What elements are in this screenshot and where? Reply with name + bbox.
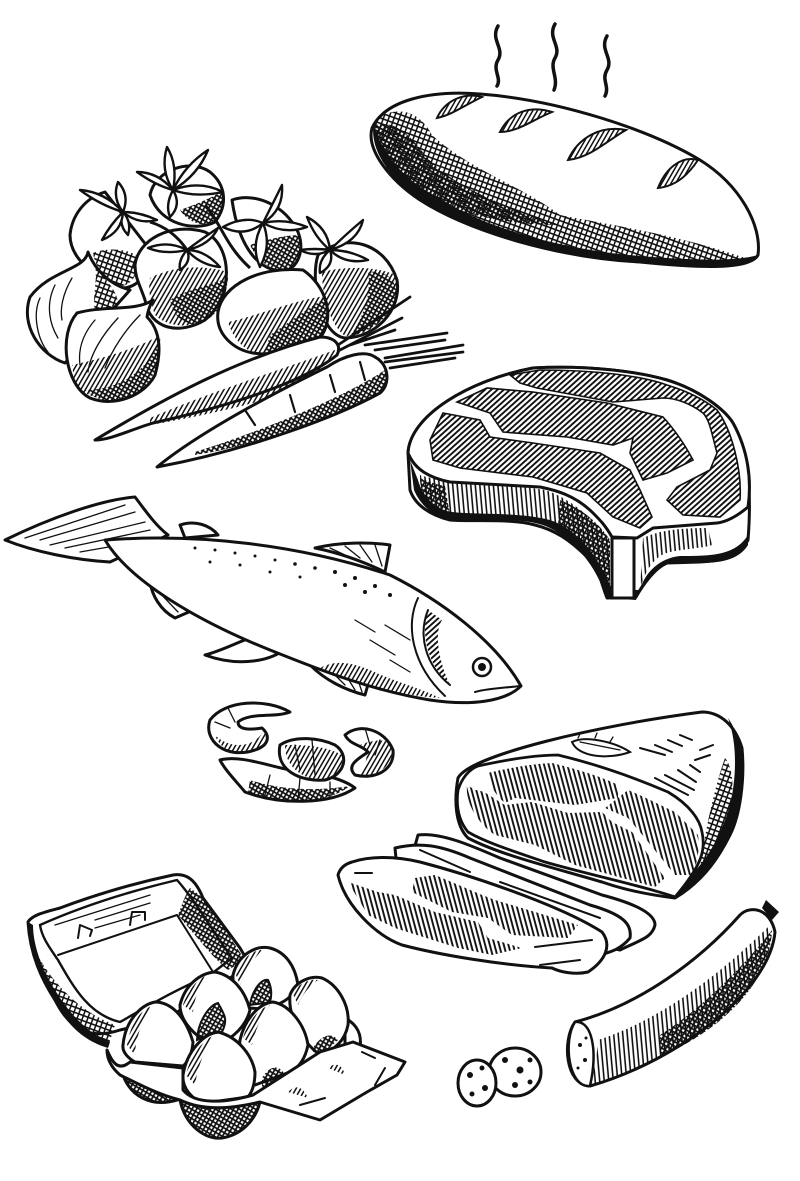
egg top middle [180,972,250,1045]
egg shading [127,1006,152,1055]
tomato stems [80,147,368,273]
sausage knot [762,900,779,920]
carrot top [95,337,339,440]
steak [408,367,749,600]
sausage slice back [489,1048,541,1096]
egg right [290,977,348,1055]
sausage [458,900,779,1106]
egg carton [28,875,405,1138]
onion front [66,300,159,401]
slice texture [467,1057,532,1096]
top tomato [150,166,224,226]
onion back [27,252,130,363]
slice meat lower [348,882,522,955]
shrimp right [345,729,393,776]
ham rind shade [700,758,732,868]
back tomato right [232,198,301,271]
lid outer shade [30,940,115,1047]
fish body [105,538,521,703]
steak meat section lower [430,413,652,528]
tomato left [135,229,226,328]
steak meat section top [510,370,740,517]
loaf body [371,93,758,266]
egg left [123,1002,193,1066]
ham rind ticks [640,735,713,795]
carton lid [28,875,250,1034]
steak meat section middle [457,388,693,480]
carton tray lip [107,1042,405,1120]
fish [5,497,521,703]
fish fins [180,523,218,538]
lid hinge shade [178,888,245,970]
ham [338,712,743,973]
carrot greens [338,297,463,368]
carton bottom cups [123,1068,177,1102]
loaf scores [437,96,482,118]
lid slots [78,912,145,938]
fish tail [5,497,168,562]
ham body [456,712,743,898]
sausage cut [569,1022,594,1086]
egg back [233,947,298,1008]
ham slice back [400,835,655,950]
sausage slice front [458,1060,496,1106]
fish shade [320,663,440,698]
slice rim marks [355,850,600,965]
steak bone [612,538,634,598]
egg center right [240,1002,308,1085]
shrimp [209,703,393,801]
tomato right [315,243,398,338]
vegetables [27,147,463,467]
ham meat right [605,790,699,875]
steam [496,24,609,96]
egg gaps [197,1003,225,1040]
shrimp left [209,703,290,753]
back tomato left [70,192,150,288]
carrot bottom [157,354,387,467]
sausage shade [590,925,770,1085]
fish spots [194,546,392,597]
shrimp bottom [220,759,355,801]
shrimp middle [279,739,344,780]
loaf shading [374,112,745,264]
steak top surface [408,367,749,538]
ham stamp [572,739,630,756]
tray back cups [345,1018,360,1050]
fish head [412,598,445,696]
slice meat upper [412,875,578,938]
ham slice front [338,858,607,973]
ham meat lower [467,785,665,887]
ham meat top [487,763,618,805]
bread loaf [371,24,758,266]
sausage body [567,910,775,1086]
egg front [183,1032,255,1103]
steak outline [408,367,749,598]
lid inner [40,880,232,1022]
steak side shading [420,475,610,590]
eggs [123,947,348,1103]
ham cut face [457,755,703,897]
tomato front [218,269,328,354]
